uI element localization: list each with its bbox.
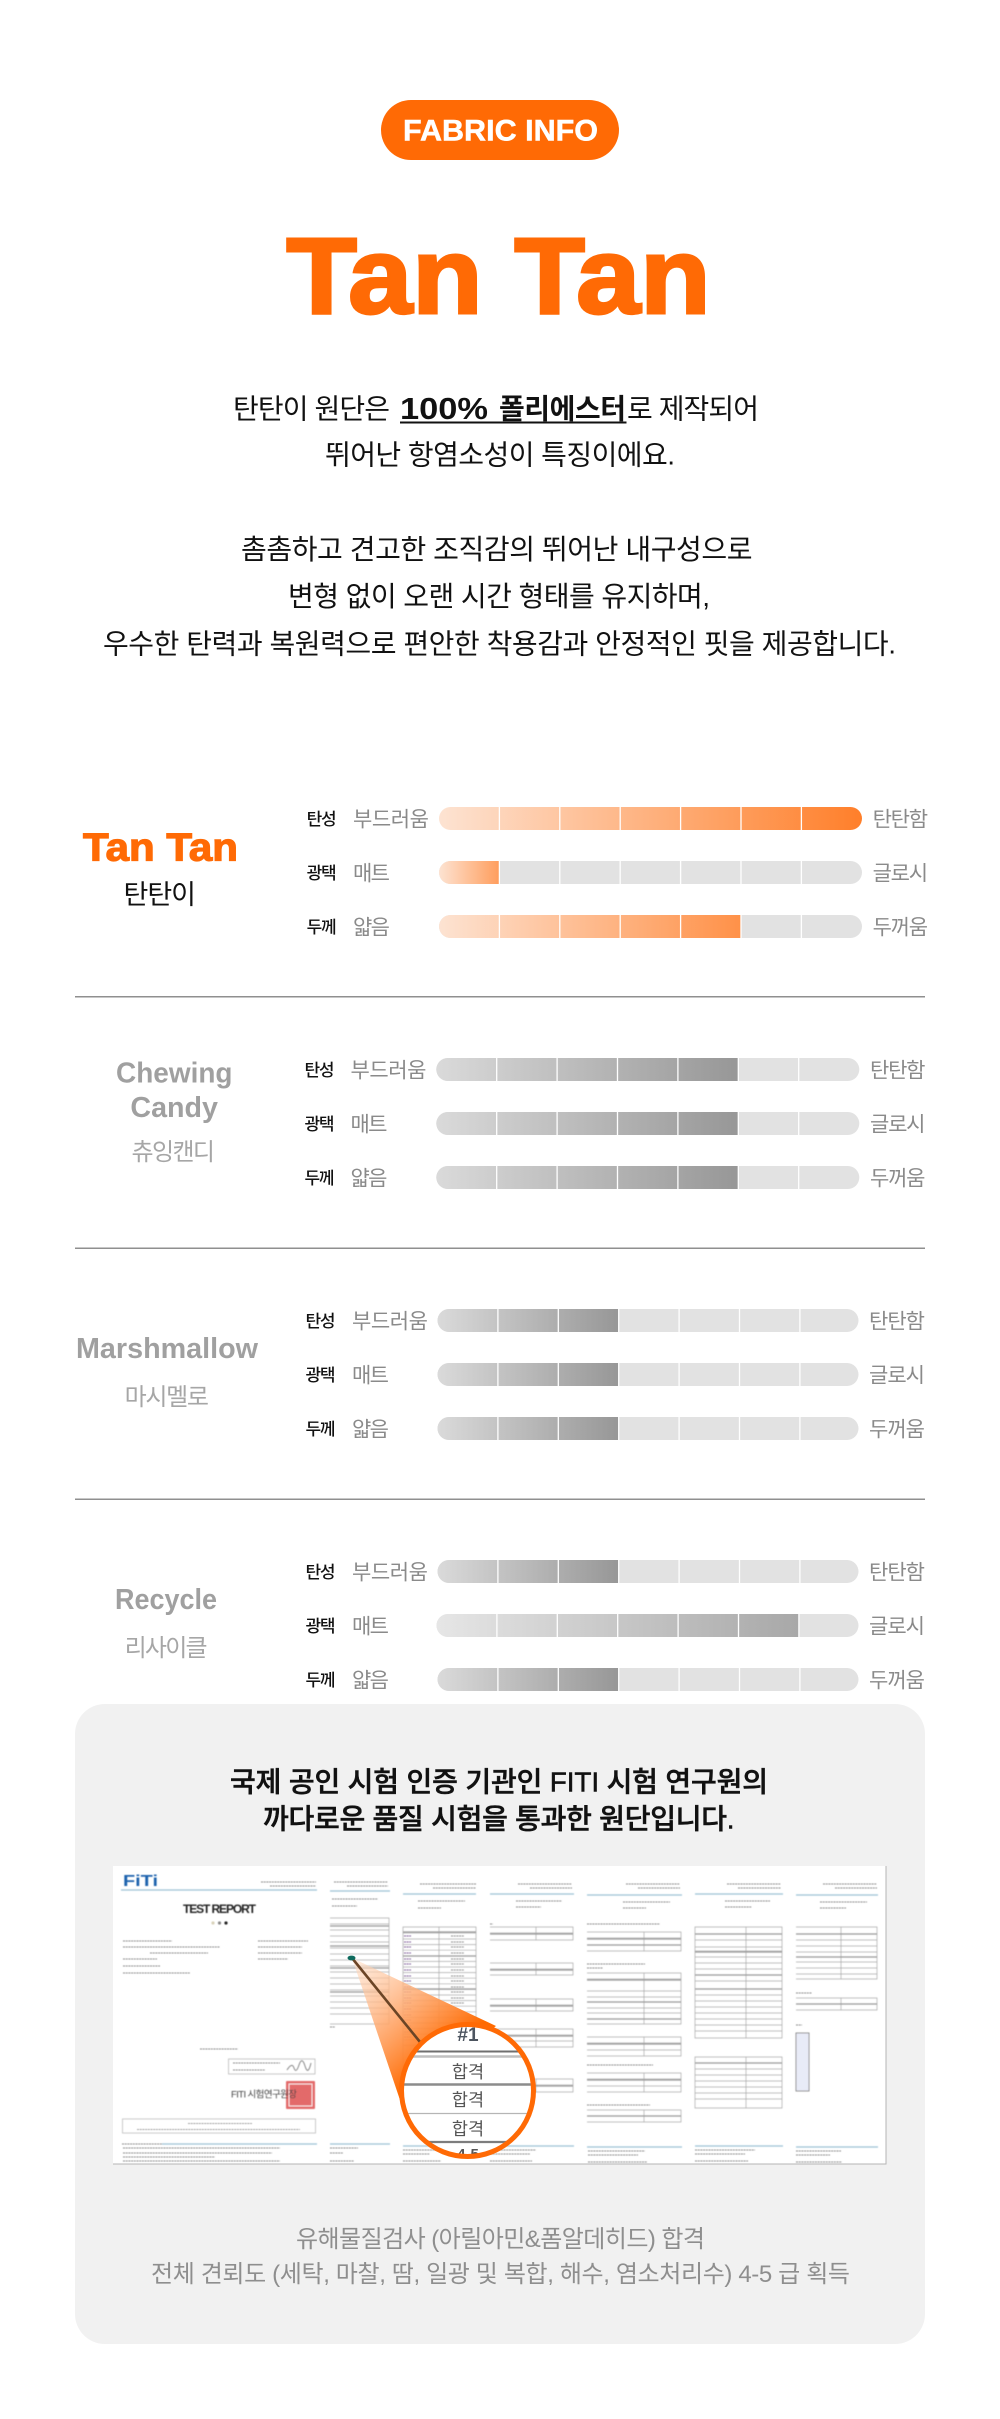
scale row: gloss: 광택 bbox=[306, 1617, 336, 1636]
scale row: elasticity: 탄탄함 bbox=[873, 808, 928, 832]
magnifier lens: pass results: 4-5 bbox=[457, 2146, 479, 2163]
report page 5 bbox=[587, 1884, 682, 2162]
text block: fabric description: 폴리에스터 bbox=[499, 394, 626, 425]
scale row: gloss: 매트 bbox=[352, 1616, 389, 1638]
scale row: elasticity: 부드러움 bbox=[352, 1562, 428, 1584]
magnifier lens: pass results: #1 bbox=[457, 2025, 479, 2046]
heading: certification: 국제 공인 시험 인증 기관인 FITI 시험 연구원의 bbox=[230, 1767, 768, 1798]
scale row: gloss: 광택 bbox=[306, 1366, 336, 1385]
scale row: thickness: 두꺼움 bbox=[869, 1418, 925, 1442]
fabric name: Marshmallow bbox=[76, 1333, 258, 1411]
report page 7 bbox=[796, 1884, 878, 2162]
scale row: gloss: 글로시 bbox=[869, 1616, 925, 1638]
scale row: thickness: 얇음 bbox=[353, 916, 390, 940]
text block: fabric description: 뛰어난 항염소성이 특징이에요. bbox=[325, 440, 675, 471]
magnifier cone bbox=[352, 1958, 496, 2100]
text block: fabric description: 탄탄이 원단은 bbox=[233, 394, 390, 425]
fabric name: Marshmallow: Marshmallow bbox=[76, 1333, 258, 1365]
scale row: thickness: 두꺼움 bbox=[873, 916, 928, 940]
scale row: thickness: 두께 bbox=[306, 1671, 336, 1690]
title: Tan Tan: Tan Tan bbox=[286, 215, 710, 336]
fabric name: Marshmallow: 마시멜로 bbox=[125, 1384, 209, 1411]
fabric name: Chewing Candy: Candy bbox=[130, 1092, 218, 1124]
fabric name: Tan Tan: 탄탄이 bbox=[124, 880, 196, 910]
scale row: gloss: 매트 bbox=[353, 862, 390, 886]
scale row: elasticity bbox=[304, 1058, 926, 1082]
scale row: gloss: 광택 bbox=[304, 1115, 334, 1134]
scale row: elasticity: 탄탄함 bbox=[869, 1310, 925, 1334]
scale row: elasticity: 부드러움 bbox=[352, 1310, 428, 1334]
scale row: thickness bbox=[304, 1166, 926, 1190]
fabric name: Recycle: Recycle bbox=[115, 1584, 217, 1616]
magnifier lens: pass results: 합격 bbox=[452, 2119, 484, 2139]
scale row: thickness: 두께 bbox=[307, 918, 337, 937]
text block: fabric description: 우수한 탄력과 복원력으로 편안한 착용감과 안정적인 핏을 제공합니다. bbox=[103, 629, 896, 660]
scale row: elasticity: 탄성 bbox=[304, 1061, 334, 1080]
text block: fabric description: 변형 없이 오랜 시간 형태를 유지하며, bbox=[288, 581, 710, 612]
panel: FITI certification bbox=[75, 1704, 925, 2344]
report page 6 bbox=[695, 1884, 783, 2161]
heading: certification: 까다로운 품질 시험을 통과한 원단입니다. bbox=[263, 1804, 734, 1835]
panel: Tan Tan fabric scale bbox=[83, 807, 928, 940]
scale row: elasticity bbox=[306, 1560, 925, 1584]
scale row: thickness: 두께 bbox=[306, 1420, 336, 1439]
test report document image bbox=[113, 1866, 886, 2164]
scale row: gloss: 글로시 bbox=[869, 1364, 925, 1388]
scale row: gloss: 광택 bbox=[307, 864, 337, 883]
report page 1: TEST REPORT bbox=[183, 1902, 257, 1916]
magnifier lens: pass results bbox=[399, 2024, 536, 2163]
scale row: gloss bbox=[304, 1112, 926, 1136]
scale row: elasticity: 탄성 bbox=[306, 1312, 336, 1331]
scale row: thickness bbox=[306, 1668, 925, 1692]
scale row: gloss bbox=[306, 1363, 925, 1388]
scale row: gloss: 글로시 bbox=[870, 1114, 926, 1136]
panel: Recycle fabric scale bbox=[115, 1560, 925, 1692]
scale row: elasticity: 부드러움 bbox=[353, 808, 429, 832]
report page 2 bbox=[330, 1882, 390, 2161]
report page 1: FITI 시험연구원장 bbox=[231, 2090, 297, 2100]
scale row: elasticity: 부드러움 bbox=[350, 1060, 426, 1082]
scale row: thickness: 두꺼움 bbox=[870, 1168, 926, 1190]
scale row: gloss: 글로시 bbox=[873, 862, 928, 886]
text block: test results: 유해물질검사 (아릴아민&폼알데히드) 합격 bbox=[296, 2226, 705, 2253]
scale row: thickness bbox=[307, 915, 928, 940]
scale row: gloss: 매트 bbox=[350, 1114, 388, 1136]
scale row: thickness: 두께 bbox=[304, 1169, 334, 1188]
scale row: thickness: 얇음 bbox=[352, 1418, 389, 1442]
report page 3 bbox=[403, 1884, 476, 2161]
scale row: elasticity bbox=[306, 1309, 925, 1334]
fabric name: Recycle bbox=[115, 1584, 217, 1662]
scale row: elasticity: 탄성 bbox=[306, 1563, 336, 1582]
scale row: elasticity: 탄탄함 bbox=[869, 1562, 925, 1584]
fabric name: Tan Tan: Tan Tan bbox=[83, 826, 238, 870]
scale row: gloss bbox=[306, 1614, 925, 1638]
text block: fabric description bbox=[103, 391, 896, 660]
panel: Chewing Candy fabric scale bbox=[116, 1058, 926, 1190]
scale row: gloss bbox=[307, 861, 928, 886]
badge: FABRIC INFO: FABRIC INFO bbox=[403, 114, 598, 148]
panel: Marshmallow fabric scale bbox=[76, 1309, 925, 1442]
fabric name: Tan Tan bbox=[83, 826, 238, 910]
report page 4 bbox=[490, 1884, 574, 2161]
text block: test results bbox=[151, 2226, 850, 2288]
badge: FABRIC INFO bbox=[381, 100, 619, 160]
scale row: thickness: 얇음 bbox=[350, 1168, 388, 1190]
text block: fabric description: 촘촘하고 견고한 조직감의 뛰어난 내구성으로 bbox=[241, 534, 752, 565]
fabric name: Chewing Candy bbox=[116, 1058, 232, 1166]
scale row: thickness: 두꺼움 bbox=[869, 1670, 925, 1692]
magnifier lens: pass results: 합격 bbox=[452, 2062, 484, 2082]
text block: test results: 전체 견뢰도 (세탁, 마찰, 땀, 일광 및 복합, 해수, 염소처리수) 4-5 급 획득 bbox=[151, 2261, 850, 2288]
scale row: elasticity: 탄탄함 bbox=[870, 1060, 926, 1082]
fabric name: Chewing Candy: Chewing bbox=[116, 1058, 232, 1090]
scale row: elasticity bbox=[307, 807, 928, 832]
scale row: thickness bbox=[306, 1417, 925, 1442]
fabric name: Recycle: 리사이클 bbox=[125, 1635, 208, 1662]
scale row: thickness: 얇음 bbox=[352, 1670, 389, 1692]
text block: fabric description: 로 제작되어 bbox=[627, 394, 759, 425]
report page 1 bbox=[121, 1873, 317, 2161]
magnifier lens: pass results: 합격 bbox=[452, 2090, 484, 2110]
scale row: gloss: 매트 bbox=[352, 1364, 389, 1388]
text block: fabric description: 100% bbox=[400, 391, 488, 426]
magnifier pointer dot and line bbox=[348, 1956, 420, 2042]
report page 1: FiTi bbox=[123, 1873, 158, 1890]
scale row: elasticity: 탄성 bbox=[307, 810, 337, 829]
fabric name: Chewing Candy: 츄잉캔디 bbox=[132, 1139, 215, 1166]
heading: certification bbox=[230, 1767, 768, 1835]
